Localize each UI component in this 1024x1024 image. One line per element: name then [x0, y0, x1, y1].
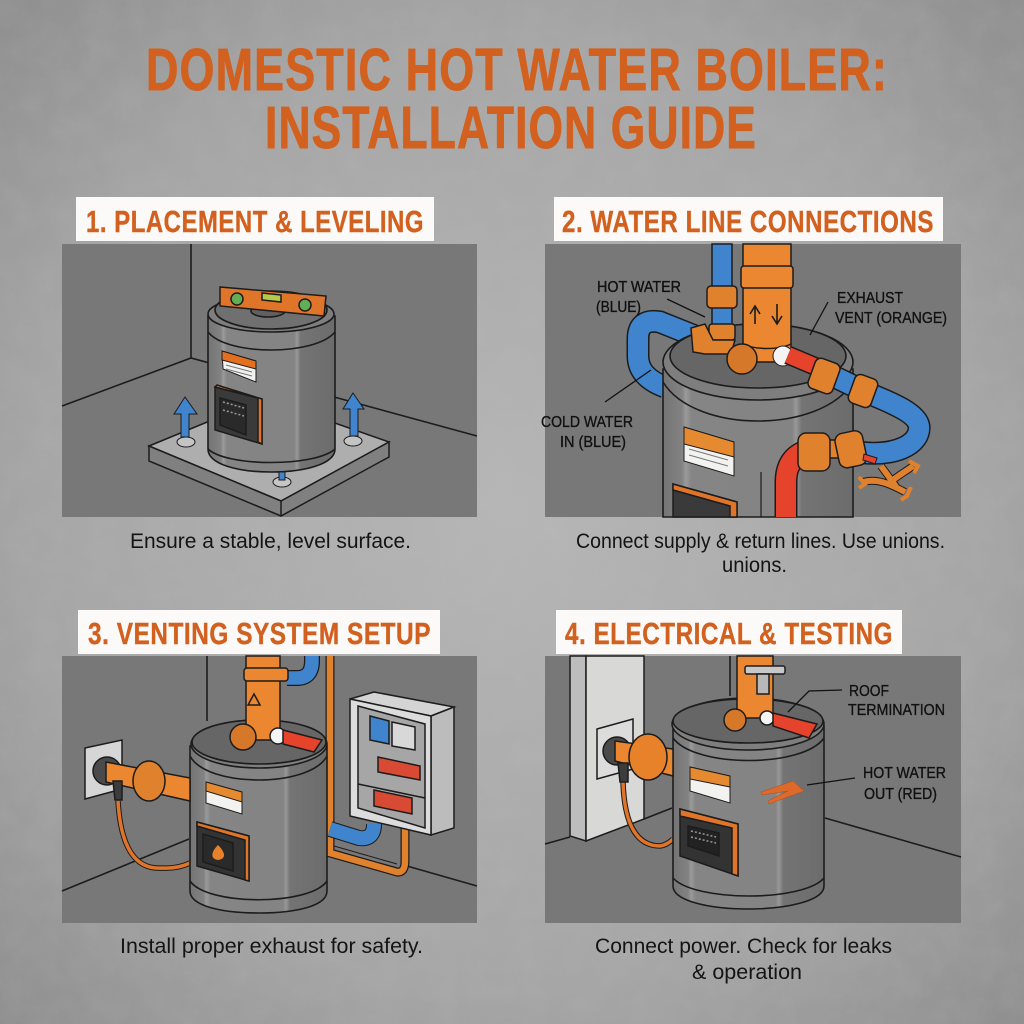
- panel 3: venting system setup: [62, 610, 477, 958]
- control panel: [680, 809, 738, 876]
- control panel: [673, 484, 737, 517]
- labels: HOT WATER: [597, 279, 681, 296]
- labels: TERMINATION: [848, 702, 945, 719]
- white wall column: [570, 656, 644, 841]
- return loop pipes: [773, 346, 919, 517]
- orange conduit and blue pipe: [330, 656, 405, 872]
- labels: [541, 279, 947, 451]
- illustration 1: [62, 244, 477, 517]
- illustration 2: [541, 244, 961, 517]
- leader lines: [605, 299, 828, 402]
- cold water pipe behind tank: [638, 321, 695, 387]
- caption 3: Install proper exhaust for safety.: [120, 935, 423, 958]
- orange pipe to outlet: [615, 734, 673, 782]
- warning label: [206, 782, 242, 814]
- panel 1: placement and leveling: [62, 197, 477, 553]
- labels: VENT (ORANGE): [835, 310, 947, 327]
- leveling arrows and feet: [174, 393, 364, 487]
- boiler tank: [663, 324, 853, 517]
- illustration 4: [545, 656, 961, 923]
- labels: COLD WATER: [541, 414, 633, 431]
- boiler tank: [208, 291, 335, 472]
- illustration 3: [62, 656, 477, 923]
- panel 4: electrical and testing: [545, 610, 961, 984]
- orange pipe to wall: [106, 761, 190, 801]
- title: INSTALLATION GUIDE: [265, 95, 757, 161]
- power cord: [623, 782, 673, 846]
- labels: IN (BLUE): [560, 434, 626, 451]
- heading 2: [554, 197, 943, 241]
- spirit level: [220, 287, 326, 316]
- electrical cabinet: [350, 692, 454, 835]
- exhaust vent orange: [741, 244, 793, 362]
- heading 1: [76, 197, 434, 241]
- heading 3: [78, 610, 440, 654]
- end cap disc: [727, 344, 757, 374]
- labels: [848, 683, 946, 803]
- power cord: [118, 801, 190, 868]
- flow arrow: [761, 781, 804, 804]
- labels: EXHAUST: [837, 290, 903, 307]
- heading 3: 3. VENTING SYSTEM SETUP: [88, 616, 431, 651]
- concrete pad: [149, 420, 389, 516]
- labels: ROOF: [849, 683, 889, 700]
- wrench: [859, 461, 918, 500]
- caption 4: [595, 935, 892, 984]
- control panel: [215, 385, 262, 444]
- hot water pipe blue: [691, 244, 737, 354]
- wall outlet: [85, 740, 122, 799]
- boiler tank: [190, 720, 327, 913]
- vent stack and hot water pipe: [724, 656, 817, 738]
- title: [146, 37, 888, 161]
- vent stack and blue elbow: [230, 656, 322, 752]
- panel 2: water line connections: [541, 197, 961, 577]
- labels: (BLUE): [596, 299, 641, 316]
- boiler tank: [672, 698, 824, 909]
- caption 2: unions.: [722, 554, 787, 577]
- warning label: [690, 767, 730, 803]
- caption 4: & operation: [692, 961, 802, 984]
- labels: HOT WATER: [863, 765, 946, 782]
- heading 4: 4. ELECTRICAL & TESTING: [565, 616, 893, 651]
- warning label: [684, 427, 734, 476]
- caption 4: Connect power. Check for leaks: [595, 935, 892, 958]
- heading 4: [556, 610, 902, 654]
- heading 1: 1. PLACEMENT & LEVELING: [86, 204, 424, 239]
- leader lines: [788, 690, 855, 785]
- wall outlet: [597, 719, 633, 779]
- caption 2: Connect supply & return lines. Use unions.: [576, 530, 945, 553]
- control panel with flame: [197, 822, 249, 881]
- warning label: [222, 351, 256, 382]
- caption 2: [576, 530, 945, 577]
- labels: OUT (RED): [864, 786, 937, 803]
- caption 1: Ensure a stable, level surface.: [130, 530, 411, 553]
